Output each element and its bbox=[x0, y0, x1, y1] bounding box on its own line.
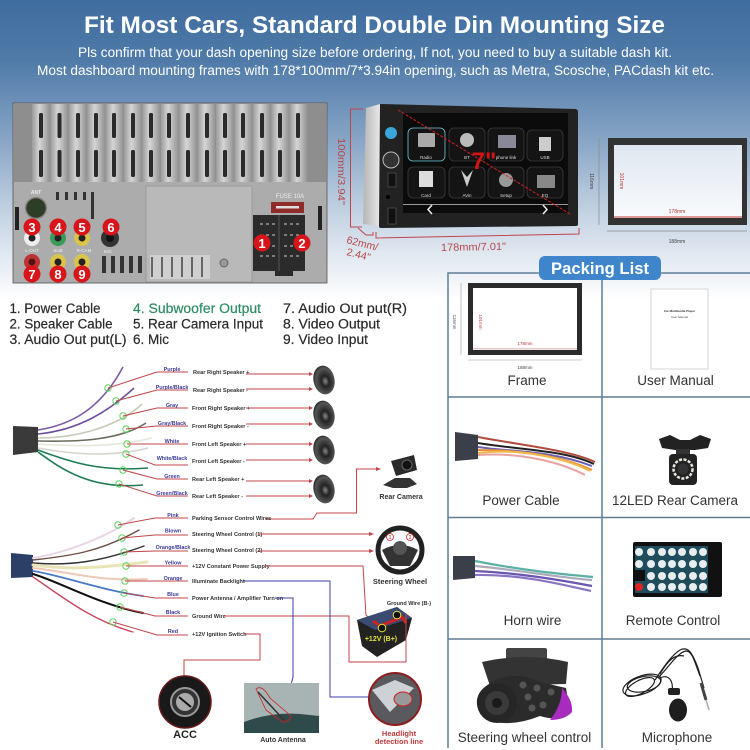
item: remote control: Remote Control bbox=[626, 613, 720, 628]
dimensions of head unit bbox=[335, 109, 579, 264]
function labels: +12V Constant Power Supply bbox=[192, 564, 270, 570]
item: steering wheel control: Steering wheel control bbox=[458, 730, 591, 745]
item: user manual bbox=[637, 289, 714, 388]
app tiles: AVin bbox=[462, 193, 472, 198]
item: horn wire bbox=[453, 556, 593, 628]
item: user manual: User Manual bbox=[671, 315, 688, 319]
RCA jacks: R-CAM bbox=[77, 248, 92, 253]
item: microphone: Microphone bbox=[642, 730, 712, 745]
function labels: Rear Right Speaker + bbox=[193, 370, 250, 376]
item: power cable bbox=[455, 432, 595, 508]
numbered markers: 5 bbox=[78, 220, 86, 235]
app tiles: Radio bbox=[420, 155, 432, 160]
function labels: Ground Wire bbox=[192, 614, 226, 620]
function labels bbox=[192, 370, 251, 500]
ACC ignition: ACC bbox=[173, 729, 197, 741]
port list: 1. Power Cable bbox=[10, 301, 100, 316]
wire colour labels: Red bbox=[168, 629, 178, 635]
wire colour labels: Purple/Black bbox=[156, 385, 188, 391]
header gradient bbox=[0, 0, 750, 300]
RCA jacks: L-OUT bbox=[25, 248, 39, 253]
item: user manual: Car Multimedia Player bbox=[664, 309, 696, 313]
steering wheel: 1 bbox=[389, 535, 392, 541]
rear camera bbox=[379, 455, 423, 501]
screen nav arrows bbox=[428, 205, 547, 214]
backlight wire bbox=[243, 581, 382, 697]
numbered markers: 9 bbox=[78, 267, 86, 282]
item: remote control bbox=[626, 542, 722, 628]
headlight: Headlight bbox=[382, 729, 417, 738]
steering wheel: 2 bbox=[409, 535, 412, 541]
speaker arrows bbox=[246, 374, 310, 496]
wire colour labels: Orange bbox=[164, 576, 182, 582]
packing list grid bbox=[448, 273, 750, 748]
numbered markers: 4 bbox=[54, 220, 62, 235]
RCA jacks: SUB bbox=[53, 248, 63, 253]
wire colour labels: Blue bbox=[167, 592, 179, 598]
port list: 5. Rear Camera Input bbox=[133, 316, 263, 332]
function labels: Steering Wheel Control (1) bbox=[192, 532, 262, 538]
function labels: Rear Left Speaker + bbox=[192, 477, 245, 483]
test points bbox=[105, 385, 130, 487]
wire colour labels: Green bbox=[164, 474, 180, 480]
dash frame drawing bbox=[588, 138, 747, 245]
function labels: +12V Ignition Switch bbox=[192, 632, 247, 638]
steering wheel bbox=[373, 528, 427, 586]
port list: 6. Mic bbox=[133, 332, 169, 347]
camera wire bbox=[266, 467, 381, 519]
dimensions of head unit: 62mm/ bbox=[345, 234, 379, 254]
subtitle bbox=[37, 45, 714, 78]
app tiles: USB bbox=[540, 155, 550, 160]
headlight: detection line bbox=[375, 737, 423, 746]
item: horn wire: Horn wire bbox=[504, 613, 561, 628]
function labels: Parking Sensor Control Wires bbox=[192, 516, 271, 522]
port list: 2. Speaker Cable bbox=[10, 316, 112, 332]
function labels: Front Right Speaker + bbox=[192, 406, 251, 412]
antenna socket: ANT bbox=[31, 190, 41, 196]
dash frame drawing: 116mm bbox=[588, 173, 594, 189]
item: frame: 101mm bbox=[478, 314, 483, 330]
wire colour labels: Blown bbox=[165, 528, 181, 534]
steering wheel: Steering Wheel bbox=[373, 577, 427, 586]
antenna socket bbox=[26, 190, 46, 218]
packing list badge bbox=[539, 256, 661, 280]
wires bbox=[33, 518, 147, 632]
item: frame: 188mm bbox=[517, 365, 533, 370]
port list: 3. Audio Out put(L) bbox=[10, 332, 126, 347]
app tiles: Setup bbox=[500, 193, 512, 198]
RCA jacks: MIC bbox=[104, 249, 113, 254]
dimensions of head unit: 2.44" bbox=[345, 246, 372, 264]
battery: Ground Wire (B-) bbox=[387, 601, 431, 607]
port list: 4. Subwoofer Output bbox=[133, 301, 261, 316]
title: Fit Most Cars, Standard Double Din Mounting Size bbox=[84, 12, 665, 39]
item: frame: 116mm bbox=[452, 315, 457, 330]
function labels: Rear Right Speaker - bbox=[193, 388, 248, 394]
dash frame drawing: 188mm bbox=[669, 239, 685, 245]
numbered markers bbox=[24, 218, 310, 282]
dash frame drawing: 101mm bbox=[618, 173, 624, 189]
subtitle: Most dashboard mounting frames with 178*100mm/7*3.94in opening, such as Metra, Scosche, PACdash kit etc. bbox=[37, 63, 714, 78]
numbered markers: 2 bbox=[298, 236, 306, 251]
fuse bbox=[271, 194, 304, 213]
dash frame drawing: 178mm bbox=[669, 209, 685, 215]
leaders bbox=[113, 518, 188, 635]
dimensions of head unit: 178mm/7.01" bbox=[441, 241, 506, 254]
item: frame bbox=[452, 283, 582, 388]
function labels: Front Left Speaker - bbox=[192, 459, 245, 465]
app tiles bbox=[408, 128, 563, 198]
battery: +12V (B+) bbox=[365, 636, 397, 643]
panel: head unit front bbox=[363, 104, 578, 228]
lower wiring harness bbox=[11, 513, 284, 638]
function labels: Illuminate Backlight bbox=[192, 579, 245, 585]
port list: 9. Video Input bbox=[283, 332, 368, 347]
item: frame: Frame bbox=[507, 373, 547, 388]
ACC ignition bbox=[159, 676, 211, 741]
item: microphone bbox=[620, 649, 712, 745]
headlight bbox=[369, 673, 423, 746]
wires bbox=[38, 367, 152, 486]
ISO connector bbox=[253, 215, 305, 276]
7 inch diagonal: 7" bbox=[472, 148, 496, 175]
speakers bbox=[311, 364, 337, 505]
function labels: Power Antenna / Amplifier Turn on bbox=[192, 596, 284, 602]
wire colour labels: Orange/Black bbox=[156, 545, 190, 551]
wire colour labels bbox=[156, 513, 190, 635]
wire colour labels: Yellow bbox=[165, 560, 182, 566]
connector bbox=[13, 426, 38, 455]
wire colour labels: White/Black bbox=[157, 456, 187, 462]
app tiles: EQ bbox=[542, 193, 549, 198]
item: rear camera: 12LED Rear Camera bbox=[612, 493, 739, 508]
numbered markers: 7 bbox=[28, 267, 36, 282]
ignition wire bbox=[182, 634, 260, 685]
item: power cable: Power Cable bbox=[482, 493, 560, 508]
packing list badge: Packing List bbox=[551, 259, 649, 278]
numbered markers: 8 bbox=[54, 267, 62, 282]
wire colour labels: White bbox=[165, 439, 179, 445]
function labels bbox=[192, 516, 284, 638]
function labels: Front Right Speaker - bbox=[192, 424, 249, 430]
fuse: FUSE 10A bbox=[276, 194, 304, 200]
item: rear camera bbox=[612, 435, 739, 508]
app tiles: Card bbox=[421, 193, 431, 198]
auto antenna bbox=[244, 683, 319, 744]
port list: 8. Video Output bbox=[283, 316, 380, 332]
numbered markers: 1 bbox=[258, 236, 266, 251]
dimensions of head unit: 100mm/3.94" bbox=[335, 138, 347, 205]
function labels: Rear Left Speaker - bbox=[192, 494, 243, 500]
numbered markers: 6 bbox=[107, 220, 115, 235]
wire colour labels: Gray bbox=[166, 403, 178, 409]
wire colour labels: Green/Black bbox=[156, 491, 188, 497]
app tiles: BT bbox=[464, 155, 470, 160]
steering control arrows bbox=[258, 532, 374, 553]
item: user manual: User Manual bbox=[637, 373, 714, 388]
port list bbox=[10, 301, 407, 347]
function labels: Steering Wheel Control (2) bbox=[192, 548, 262, 554]
ground wire bbox=[223, 613, 406, 662]
7 inch diagonal bbox=[398, 110, 570, 214]
panel: rear of head unit bbox=[13, 103, 327, 283]
wire colour labels: Pink bbox=[167, 513, 179, 519]
rear camera: Rear Camera bbox=[379, 494, 423, 501]
wire colour labels: Black bbox=[166, 610, 180, 616]
wire colour labels: Purple bbox=[164, 367, 180, 373]
connector bbox=[11, 553, 33, 578]
subtitle: Pls confirm that your dash opening size before ordering, If not, you need to buy a suitable dash kit. bbox=[78, 45, 672, 60]
function labels: Front Left Speaker + bbox=[192, 442, 247, 448]
power supply wire bbox=[265, 566, 373, 622]
wire colour labels bbox=[156, 367, 188, 497]
port list: 7. Audio Out put(R) bbox=[283, 301, 407, 316]
app tiles: phone link bbox=[496, 155, 517, 160]
item: frame: 178mm bbox=[517, 341, 533, 346]
antenna wire bbox=[275, 598, 293, 708]
battery bbox=[357, 601, 431, 657]
auto antenna: Auto Antenna bbox=[260, 737, 306, 744]
item: steering wheel control bbox=[458, 648, 591, 745]
upper wiring harness bbox=[13, 367, 313, 500]
RCA jacks bbox=[24, 229, 119, 270]
knob and buttons bbox=[383, 127, 399, 224]
wire colour labels: Gray/Black bbox=[158, 421, 186, 427]
numbered markers: 3 bbox=[28, 220, 36, 235]
leaders bbox=[108, 372, 188, 496]
test points bbox=[110, 522, 129, 625]
